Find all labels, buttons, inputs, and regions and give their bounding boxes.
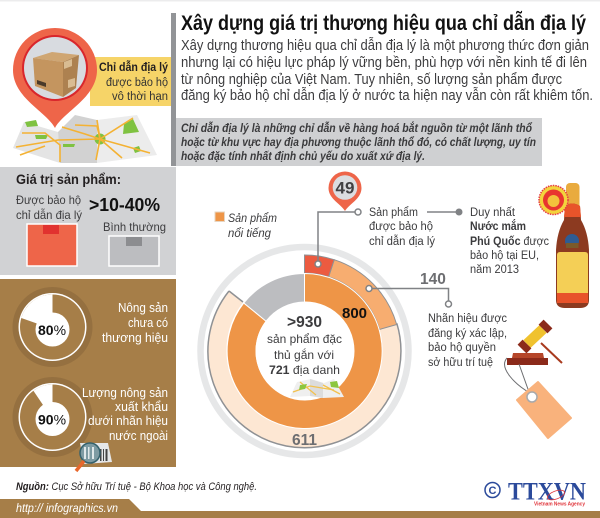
- decorative side bar: [171, 13, 176, 166]
- text: export share: [82, 386, 168, 443]
- chart: product donut: [200, 247, 408, 455]
- text: Phu Quoc note: [470, 207, 549, 276]
- segment: red 49: [304, 255, 334, 277]
- text: protected label: Được bảo hộ: [16, 193, 81, 207]
- panel: definition: [176, 118, 542, 166]
- text: trademark note: đăng ký xác lập,: [428, 328, 507, 340]
- arrow: leader to 140 segment: [366, 286, 452, 307]
- icon: red protected box: [27, 224, 77, 266]
- text: donut centre: sản phẩm đặc: [267, 332, 342, 346]
- logo: copyright: C: [489, 485, 497, 497]
- text block: introduction: [181, 37, 593, 104]
- callout: yellow label: Chỉ dẫn địa lý: [99, 61, 169, 74]
- icon: quality seal: [539, 186, 568, 214]
- icon: gavel: [507, 324, 562, 365]
- arrow: leader to Phu Quoc note: [427, 208, 462, 216]
- panel: definition: Chỉ dẫn địa lý là những chỉ dẫn về hàng hoá bắt nguồn từ một lãnh thổ: [181, 122, 533, 135]
- text: donut centre: [267, 314, 342, 377]
- text: unbranded products: Nông sản: [118, 301, 168, 315]
- legend: famous products: Sản phẩm: [228, 213, 277, 225]
- panel: product value: [0, 167, 176, 275]
- icon: pin 49: [328, 172, 362, 211]
- icon: gray normal box: [109, 236, 159, 266]
- text block: introduction: từ nông nghiệp của Việt Nam. Tuy nhiên, số lượng sản phẩm được: [181, 72, 562, 88]
- text: unbranded products: chưa có: [128, 316, 168, 330]
- value: 140: 140: [420, 271, 446, 288]
- chart: 90 percent donut: 90%: [38, 412, 66, 428]
- heading: product value: Giá trị sản phẩm:: [16, 172, 121, 187]
- text: trademark note: Nhãn hiệu được: [428, 313, 507, 325]
- legend: famous products: nổi tiếng: [228, 228, 272, 240]
- text: export share: dưới nhãn hiệu: [88, 414, 168, 428]
- value: premium percent: >10-40%: [89, 195, 160, 215]
- text: export share: Lượng nông sản: [82, 386, 168, 400]
- text: protected products: được bảo hộ: [369, 221, 433, 233]
- callout: yellow label: [90, 57, 171, 106]
- text: protected label: [16, 193, 82, 222]
- text: Phu Quoc note: Nước mắm: [470, 220, 526, 233]
- chart: 80 percent donut: 80%: [38, 322, 66, 338]
- text: trademark note: bảo hộ quyền: [428, 342, 496, 354]
- panel: definition: hoặc đặc tính nhất định chủ yếu do xuất xứ địa lý.: [181, 151, 425, 163]
- text: donut centre: 721 địa danh: [269, 363, 340, 377]
- segment: famous products: [227, 273, 382, 428]
- arrow: leader to 49 segment: [315, 209, 361, 267]
- icon: pin 49: 49: [336, 178, 354, 198]
- value: 800: 800: [342, 305, 367, 322]
- value: 611: 611: [292, 432, 317, 449]
- text: Phu Quoc note: Duy nhất: [470, 207, 516, 219]
- chart: 80 percent donut: [12, 287, 92, 367]
- logo: TTXVN: TTXVN: [508, 478, 586, 506]
- text: export share: xuất khẩu: [115, 400, 168, 414]
- text: unbranded products: [102, 301, 168, 345]
- decorative outer ring: [200, 247, 408, 455]
- callout: yellow label: vô thời hạn: [112, 91, 168, 103]
- logo: copyright: [485, 482, 500, 498]
- logo: TTXVN: Vietnam News Agency: [534, 502, 585, 508]
- segment: orange 140: [329, 260, 397, 330]
- panel: protection callout: [13, 28, 171, 163]
- source note: Nguồn: Cục Sở hữu Trí tuệ - Bộ Khoa học và Công nghệ.: [16, 481, 257, 493]
- text: protected products: chỉ dẫn địa lý: [369, 235, 435, 248]
- callout: yellow label: được bảo hộ: [106, 77, 168, 89]
- icon: folded map: [13, 115, 157, 163]
- footer band: [0, 499, 600, 518]
- segment: peach 611: [208, 292, 400, 448]
- panel: farm products: [0, 279, 176, 471]
- text: Phu Quoc note: Phú Quốc được: [470, 236, 549, 248]
- icon: price tag: [505, 358, 571, 438]
- chart: 90 percent donut: [12, 377, 92, 457]
- text: trademark note: sở hữu trí tuệ: [428, 357, 493, 369]
- text: protected products: Sản phẩm: [369, 207, 418, 219]
- segment: gray share: [244, 274, 304, 321]
- icon: fish sauce bottle: [556, 183, 589, 308]
- text: export share: nước ngoài: [109, 429, 168, 443]
- icon: barcode and magnifier: [76, 443, 112, 471]
- text: donut centre: thủ gắn với: [274, 347, 334, 362]
- text: normal label: Bình thường: [103, 220, 166, 234]
- text: trademark note: [428, 313, 507, 369]
- text: donut centre: >930: [287, 314, 322, 331]
- icon: red location pin with parcel: [13, 28, 97, 128]
- text: protected products: [369, 207, 435, 248]
- text: Phu Quoc note: năm 2013: [470, 264, 519, 276]
- panel: definition: hoặc từ khu vực hay địa phương thuộc lãnh thổ đó, có chất lượng, uy tín: [181, 137, 536, 149]
- legend: famous products: [215, 212, 277, 240]
- text: protected label: chỉ dẫn địa lý: [16, 207, 82, 222]
- text: Phu Quoc note: bảo hộ tại EU,: [470, 250, 539, 262]
- footer band: http:// infographics.vn: [16, 501, 118, 515]
- icon: small map: [290, 379, 344, 398]
- text: unbranded products: thương hiệu: [102, 331, 168, 345]
